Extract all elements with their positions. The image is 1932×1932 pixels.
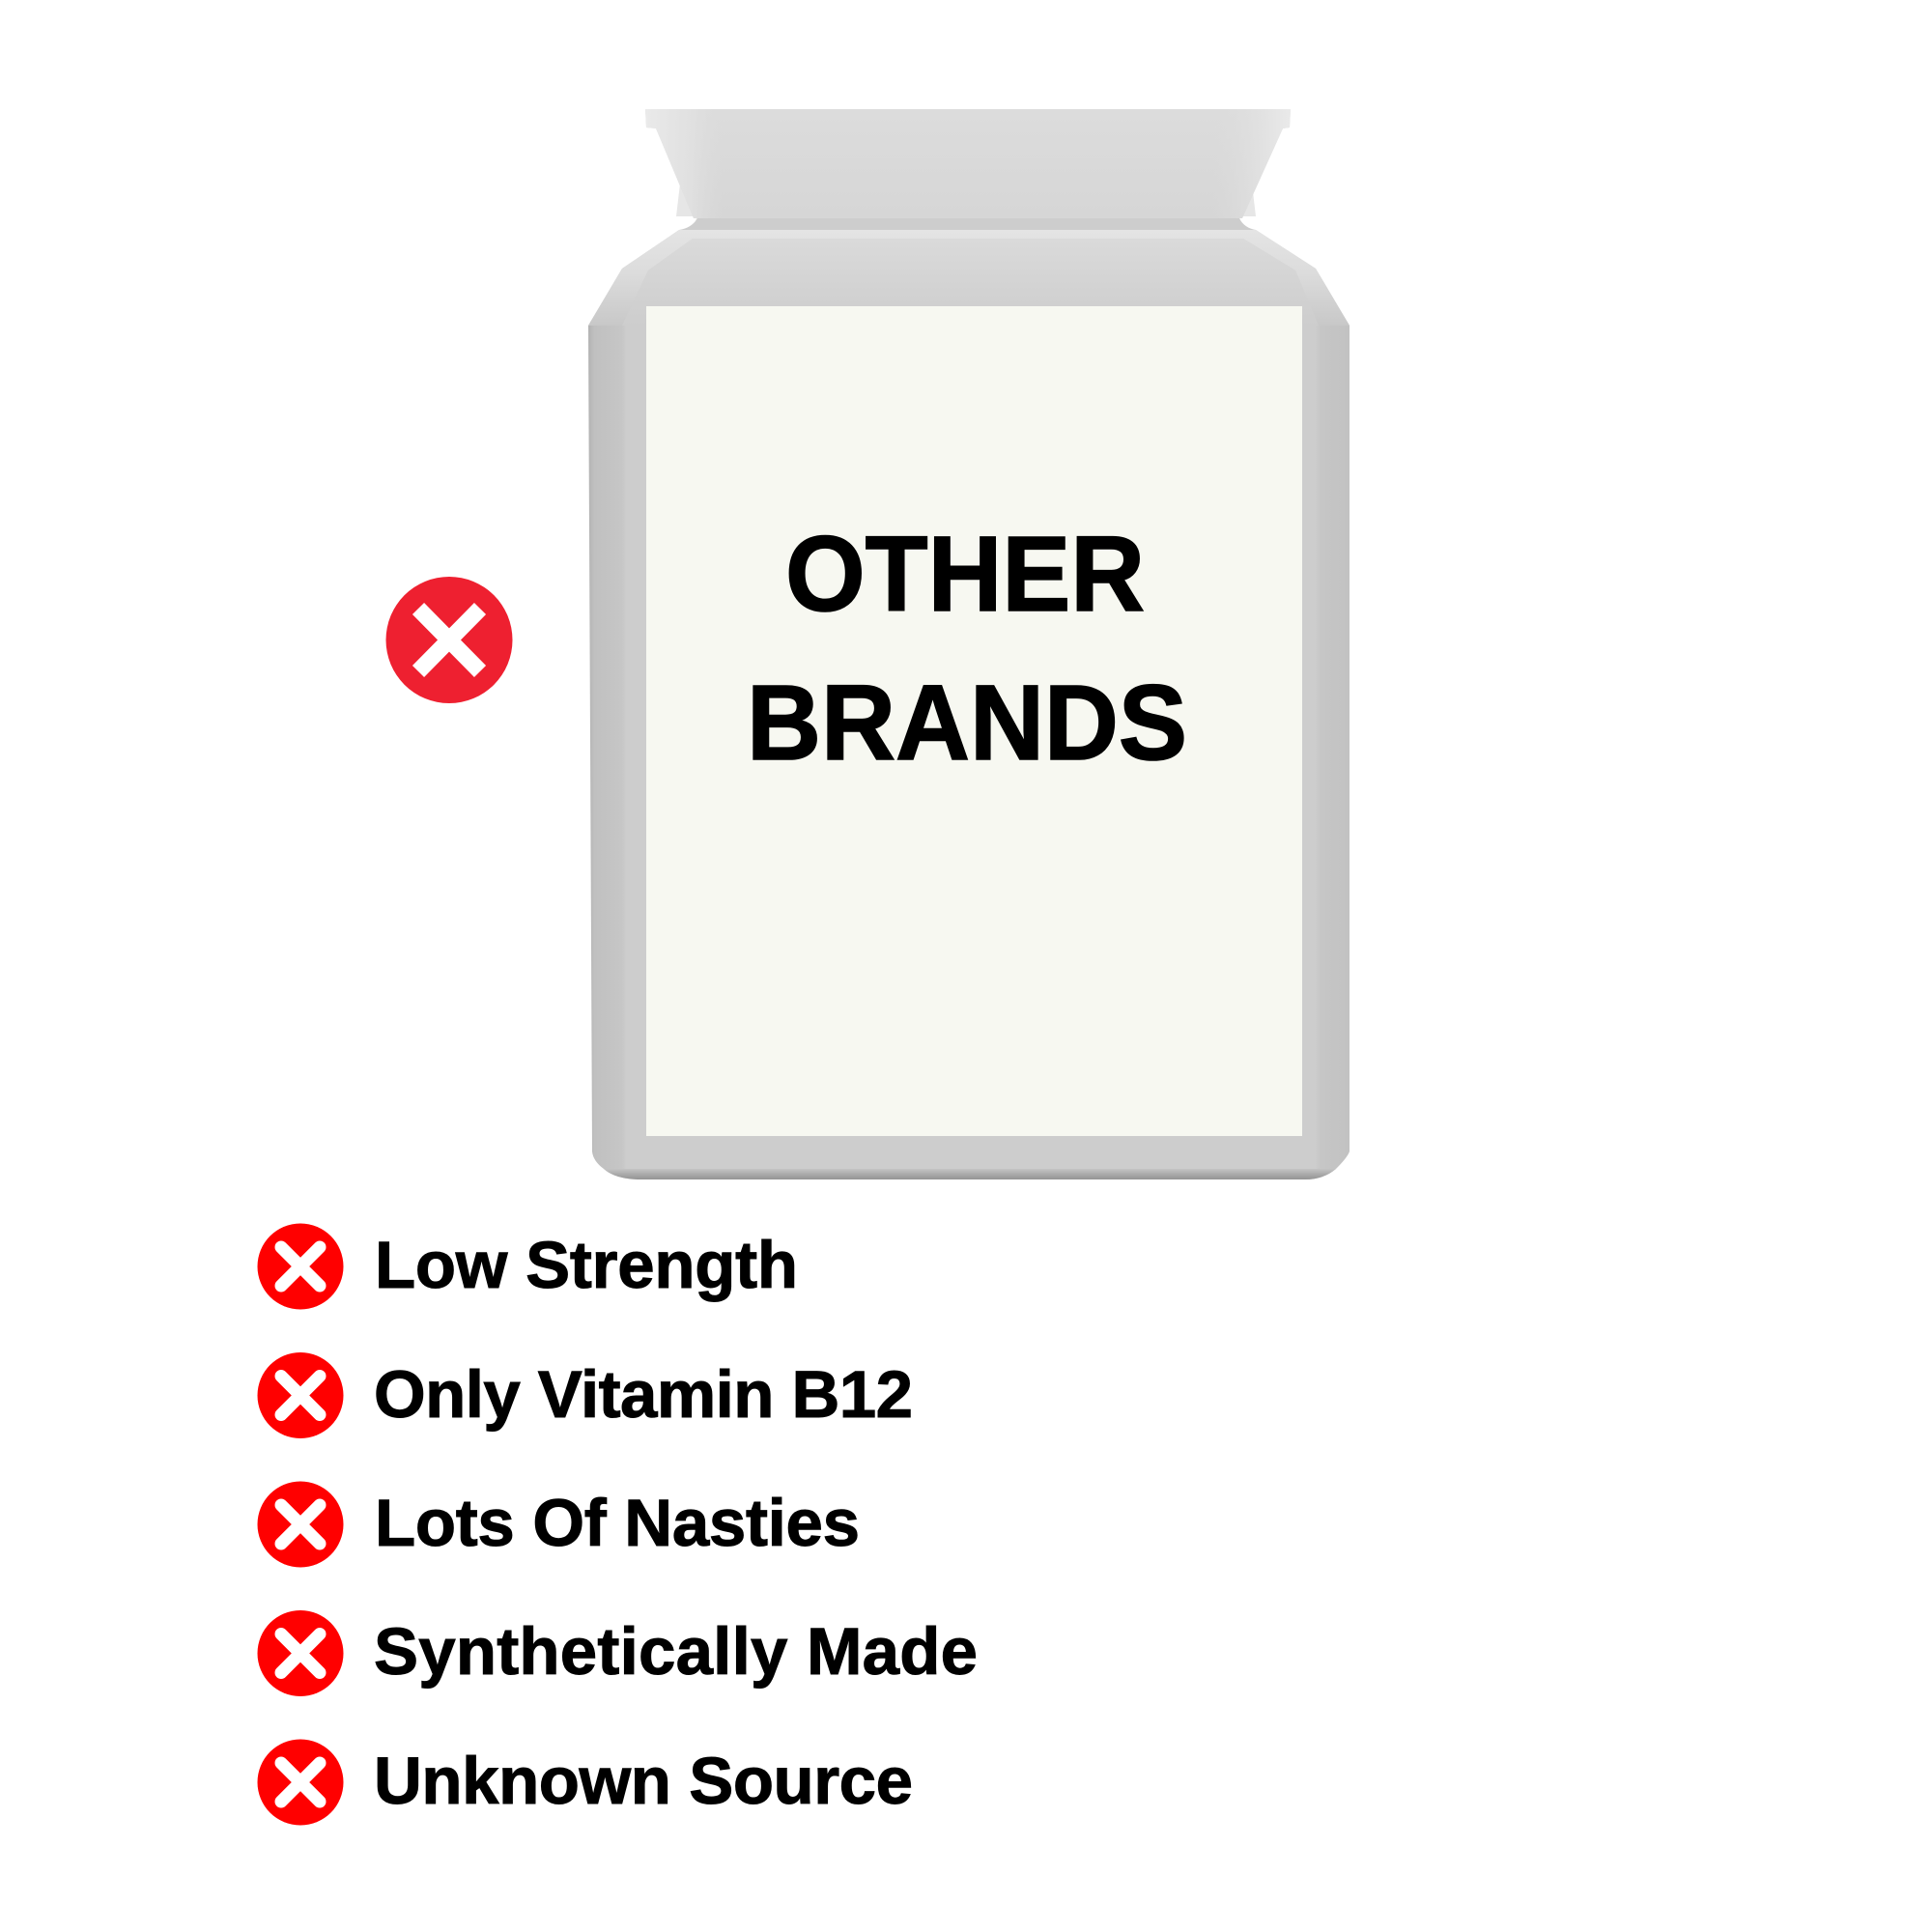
label text: other brands: BRANDS xyxy=(747,664,1187,782)
bottle xyxy=(588,109,1350,1179)
list item: lots of nasties xyxy=(257,1482,860,1567)
label text: other brands xyxy=(747,515,1187,782)
list item: low strength xyxy=(257,1223,798,1310)
bottle base band xyxy=(604,1169,1336,1179)
lid flange xyxy=(676,184,1256,216)
label text: other brands: OTHER xyxy=(785,515,1145,634)
bottle neck xyxy=(692,213,1242,232)
bottle shoulder bevel xyxy=(588,230,1350,326)
lid side sheen xyxy=(645,109,1291,218)
icon: large red cross badge xyxy=(386,577,512,703)
bottle shoulder panel xyxy=(622,239,1319,326)
product label xyxy=(646,306,1302,1136)
list item: lots of nasties: Lots Of Nasties xyxy=(375,1486,860,1560)
list item: low strength: Low Strength xyxy=(375,1228,798,1302)
lid xyxy=(645,109,1291,218)
list item: only vitamin b12: Only Vitamin B12 xyxy=(374,1357,913,1432)
feature list xyxy=(257,1223,978,1826)
list item: unknown source: Unknown Source xyxy=(374,1744,913,1818)
list item: synthetically made: Synthetically Made xyxy=(374,1614,978,1689)
bottle body xyxy=(588,218,1350,1179)
